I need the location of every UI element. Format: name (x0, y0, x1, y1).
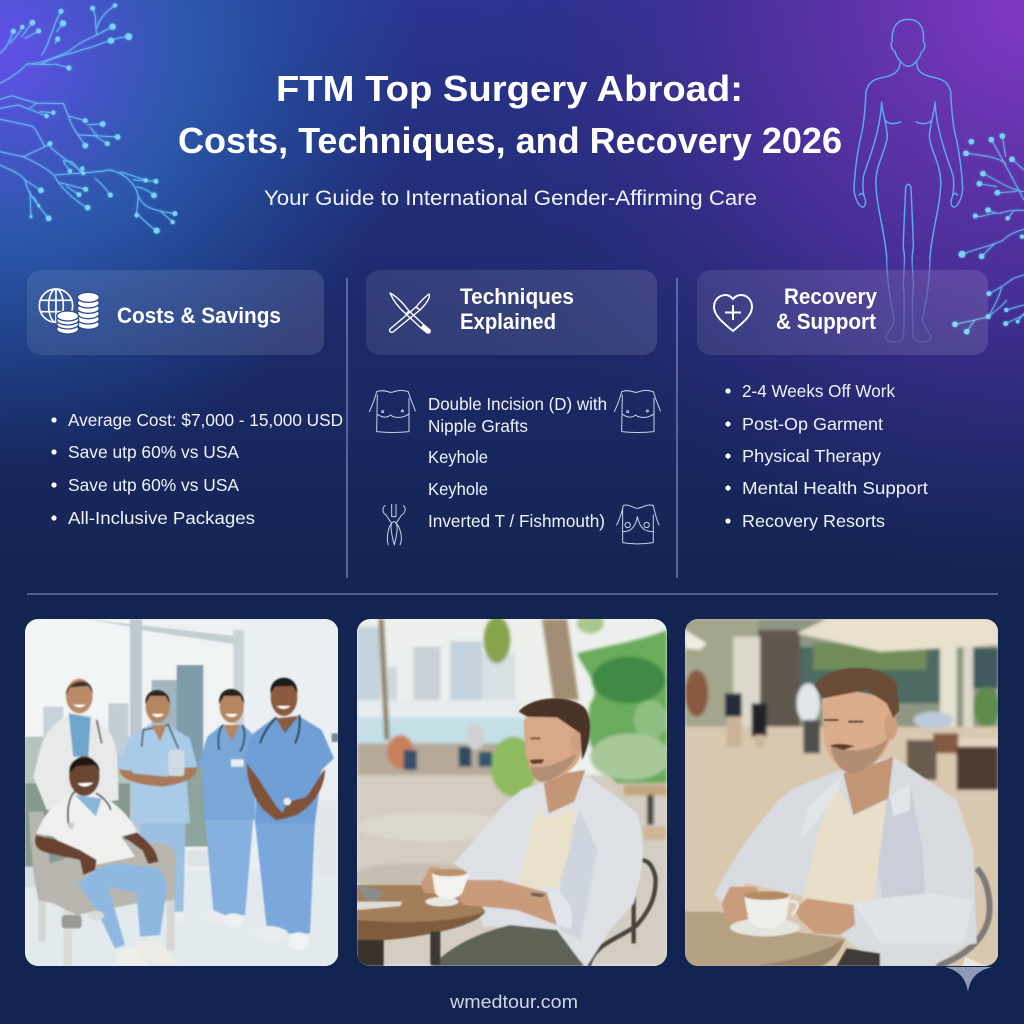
doctor (33, 679, 119, 810)
list: recovery and support: Post-Op Garment (742, 414, 883, 434)
cafe chair (937, 868, 990, 966)
list: recovery and support: Mental Health Support (742, 478, 928, 498)
icon: sparkle star (945, 957, 992, 992)
list: costs and savings (51, 410, 343, 528)
list: costs and savings: Save utp 60% vs USA (68, 475, 239, 495)
man body (453, 773, 643, 966)
branch nodes: right (952, 133, 1024, 334)
list: techniques: Double Incision (D) with (428, 394, 607, 414)
seated man and chair (29, 756, 178, 966)
title: Costs, Techniques, and Recovery 2026 (178, 120, 842, 161)
list: costs and savings: Save utp 60% vs USA (68, 442, 239, 462)
icon: heart with plus (714, 295, 752, 331)
heading: techniques explained: Explained (460, 309, 556, 334)
stubble (530, 753, 577, 782)
list: costs and savings: Average Cost: $7,000 - 15,000 USD (68, 410, 343, 430)
list: techniques: Inverted T / Fishmouth) (428, 511, 605, 531)
icon: crossed scalpels (390, 293, 430, 333)
panel: costs and savings header (27, 270, 324, 355)
list: recovery and support: 2-4 Weeks Off Work (742, 381, 895, 401)
nurse 2 (117, 690, 197, 924)
icon: chest diagram double incision (369, 390, 415, 432)
icon: inverted t diagram (383, 504, 405, 545)
footer website: wmedtour.com (449, 992, 578, 1012)
man body (715, 757, 977, 966)
icon: chest diagram double incision right (614, 390, 660, 432)
stubble (830, 738, 888, 773)
decorative neural branches: top left (0, 5, 175, 231)
photo: man at seaside cafe (357, 619, 667, 966)
heading: techniques explained: Techniques (460, 284, 574, 309)
nurse 4 (243, 678, 334, 950)
horizontal divider (27, 593, 998, 595)
heading: techniques explained (460, 284, 574, 334)
list: recovery and support (725, 381, 928, 531)
list: recovery and support: Physical Therapy (742, 446, 881, 466)
list: techniques: Nipple Grafts (428, 416, 528, 436)
branch nodes: top left (11, 3, 177, 234)
list: techniques (428, 394, 607, 531)
footer overlay with star and website (449, 957, 992, 1012)
cafe chair (588, 860, 655, 966)
panel: techniques header (366, 270, 657, 355)
icon: globe and coins (39, 289, 99, 334)
heading: recovery and support: Recovery (784, 284, 878, 309)
column dividers (347, 278, 677, 578)
decorative neural branches: right (955, 136, 1024, 332)
coffee cup (425, 897, 458, 906)
list: recovery and support: Recovery Resorts (742, 511, 885, 531)
icon: chest diagram fishmouth (617, 505, 659, 544)
subtitle: Your Guide to International Gender-Affirming Care (264, 187, 757, 210)
table (357, 885, 485, 942)
list: techniques: Keyhole (428, 447, 488, 467)
human body outline (854, 19, 963, 342)
photo: man at plaza cafe (685, 619, 998, 966)
list: techniques: Keyhole (428, 479, 488, 499)
photo: medical team (25, 619, 338, 966)
title (178, 68, 842, 161)
nurse 3 (198, 689, 255, 928)
table (685, 912, 845, 966)
coffee cup (730, 918, 800, 936)
heading: recovery and support (776, 284, 878, 334)
forearm and hands (454, 880, 557, 925)
title: FTM Top Surgery Abroad: (276, 68, 743, 109)
list: costs and savings: All-Inclusive Packages (68, 508, 255, 528)
panel: recovery header (697, 270, 988, 355)
heading: recovery and support: & Support (776, 309, 877, 334)
heading: costs and savings: Costs & Savings (117, 303, 281, 328)
hands (722, 887, 760, 922)
